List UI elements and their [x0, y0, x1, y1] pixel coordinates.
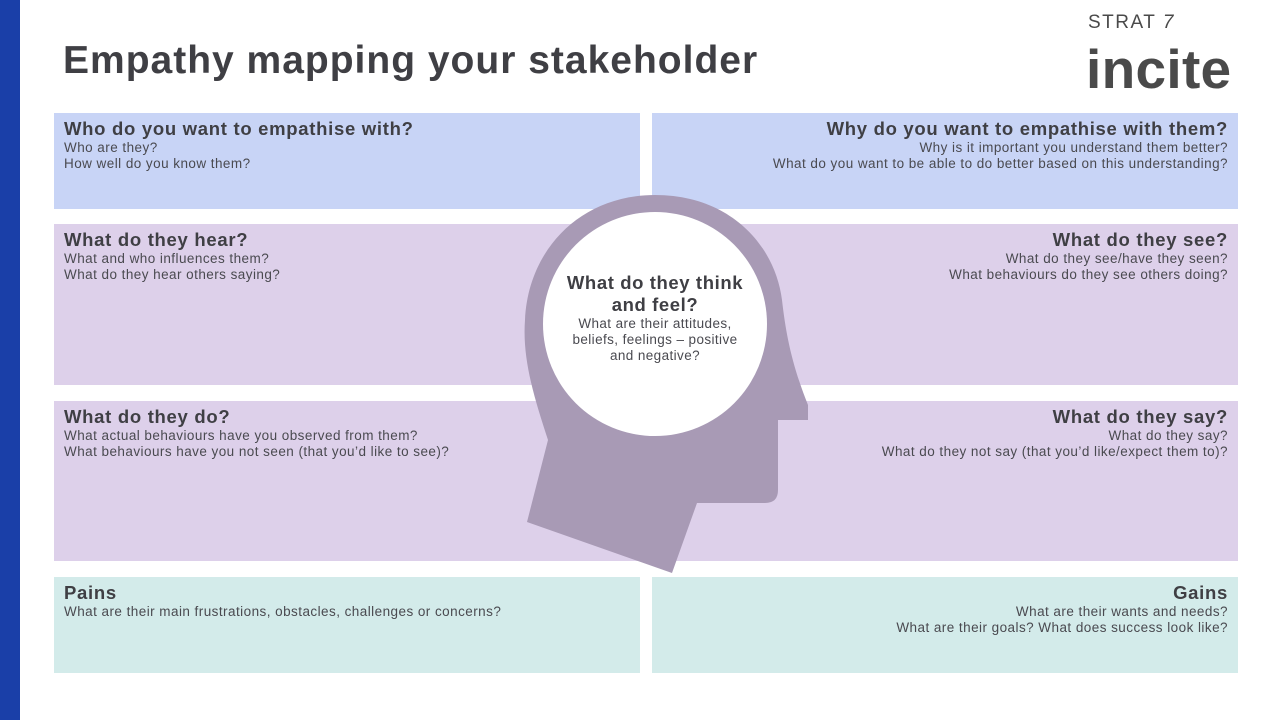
panel: who: Who are they? — [64, 140, 158, 155]
panel: gains: Gains — [1173, 582, 1228, 603]
panel: gains: What are their goals? What does success look like? — [896, 620, 1228, 635]
panel: see: What do they see? — [1053, 229, 1228, 250]
panel: why: What do you want to be able to do better based on this understanding? — [773, 156, 1228, 171]
panel: who: Who do you want to empathise with? — [64, 118, 414, 139]
panel: who: How well do you know them? — [64, 156, 251, 171]
panel: say — [652, 401, 1238, 561]
panel: hear: What and who influences them? — [64, 251, 269, 266]
panel: gains: What are their wants and needs? — [1016, 604, 1228, 619]
panel: why: Why do you want to empathise with them? — [827, 118, 1228, 139]
logo: STRAT 7 — [1088, 12, 1175, 33]
panel: hear: What do they hear? — [64, 229, 248, 250]
panel: say: What do they say? — [1053, 406, 1228, 427]
center text: think and feel: and feel? — [612, 294, 698, 315]
panel: say: What do they say? — [1109, 428, 1228, 443]
panel: pains: What are their main frustrations, obstacles, challenges or concerns? — [64, 604, 501, 619]
panel: why — [652, 113, 1238, 209]
panel: pains: Pains — [64, 582, 117, 603]
panel: see — [652, 224, 1238, 385]
panel: see: What behaviours do they see others doing? — [949, 267, 1228, 282]
center text: think and feel: beliefs, feelings – positive — [572, 332, 738, 347]
panel: pains — [54, 577, 640, 673]
center text: think and feel: and negative? — [610, 348, 700, 363]
panel: do: What do they do? — [64, 406, 230, 427]
panel: hear: What do they hear others saying? — [64, 267, 280, 282]
title: Empathy mapping your stakeholder — [63, 39, 758, 82]
panel: who — [54, 113, 640, 209]
panel: hear — [54, 224, 640, 385]
center text: think and feel — [566, 272, 743, 363]
panel: see: What do they see/have they seen? — [1006, 251, 1228, 266]
panel: why: Why is it important you understand them better? — [919, 140, 1228, 155]
panel: say: What do they not say (that you’d like/expect them to)? — [882, 444, 1228, 459]
panel: gains — [652, 577, 1238, 673]
side bar — [0, 0, 20, 720]
panel: do — [54, 401, 640, 561]
panel: do: What behaviours have you not seen (that you’d like to see)? — [64, 444, 449, 459]
center text: think and feel: What are their attitudes, — [578, 316, 732, 331]
logo: incite — [1086, 38, 1231, 100]
panel: do: What actual behaviours have you observed from them? — [64, 428, 418, 443]
center text: think and feel: What do they think — [567, 272, 743, 293]
